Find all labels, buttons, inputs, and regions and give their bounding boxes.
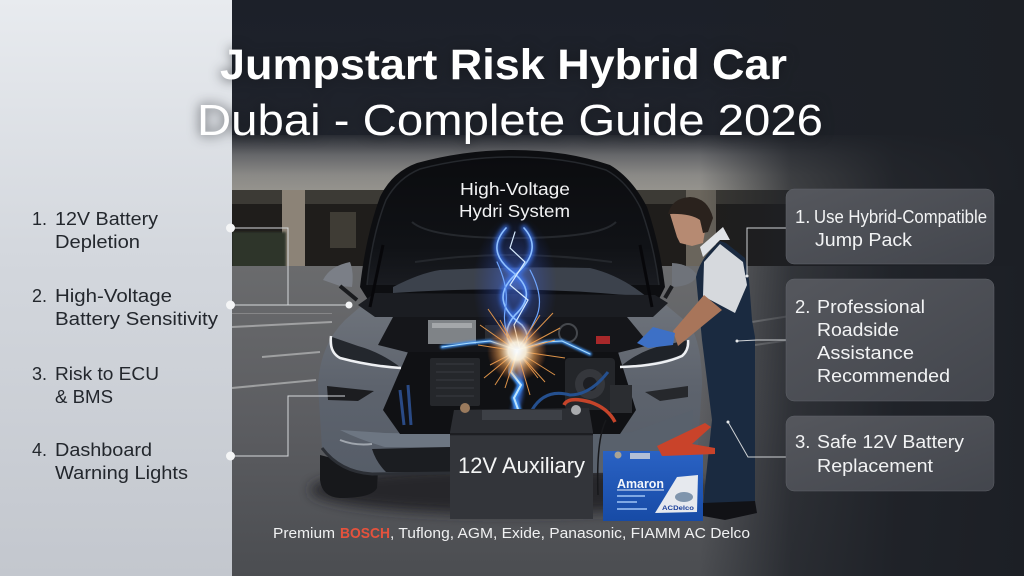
card 2: Roadside <box>817 319 899 340</box>
brand label: ACDelco <box>662 505 694 512</box>
sparks <box>478 309 565 395</box>
card 1 <box>786 189 994 264</box>
risk 2: High-Voltage <box>55 286 172 306</box>
brand label <box>617 475 698 513</box>
worker arm <box>673 295 722 346</box>
card 3 <box>786 416 994 491</box>
side mirrors <box>323 262 697 300</box>
risk 1 <box>32 209 158 252</box>
brands line: Premium <box>273 525 335 542</box>
brands line: BOSCH <box>340 525 390 542</box>
title: Jumpstart Risk Hybrid Car <box>220 41 787 89</box>
risk 4: Dashboard <box>55 440 152 460</box>
worker head <box>668 197 713 246</box>
card 2 <box>786 279 994 401</box>
car body <box>318 300 702 474</box>
risks list <box>32 209 218 483</box>
card 3: Replacement <box>817 455 933 476</box>
hood label: High-Voltage <box>460 179 570 199</box>
jump pack battery <box>603 423 715 521</box>
card 3: 3. <box>795 431 810 452</box>
12V auxiliary battery <box>450 400 615 519</box>
hood label <box>459 179 570 221</box>
title <box>197 41 823 145</box>
worker <box>637 197 757 520</box>
battery label: 12V Auxiliary <box>458 453 585 478</box>
risk 2: 2. <box>32 286 47 306</box>
blue glove <box>637 327 675 348</box>
engine bay <box>378 317 650 434</box>
right panel: actions <box>786 189 994 491</box>
lower bumper <box>322 410 693 474</box>
headlights <box>327 336 688 401</box>
hood label: Hydri System <box>459 201 570 221</box>
card 2: 2. <box>795 296 810 317</box>
risk 2 <box>32 286 218 329</box>
worker collar <box>700 227 730 257</box>
card 2: Professional <box>817 296 925 317</box>
card 1: Jump Pack <box>815 229 913 250</box>
left connectors <box>226 224 352 460</box>
car shadow and wheel <box>310 455 710 514</box>
worker boots <box>703 501 757 520</box>
electric arc <box>442 215 590 412</box>
right connectors <box>726 228 786 457</box>
card 2: Assistance <box>817 342 914 363</box>
car <box>310 150 710 514</box>
card 1: Use Hybrid-Compatible <box>814 206 987 227</box>
risk 4 <box>32 440 188 483</box>
risk 3: & BMS <box>55 387 113 407</box>
left panel <box>0 0 232 576</box>
title: Dubai - Complete Guide 2026 <box>197 96 823 145</box>
risk 1: 1. <box>32 209 47 229</box>
card 1: 1. <box>795 206 810 227</box>
worker shirt <box>703 244 747 313</box>
risk 4: 4. <box>32 440 47 460</box>
risk 1: Depletion <box>55 232 140 252</box>
card 3: Safe 12V Battery <box>817 431 965 452</box>
open hood <box>358 150 668 317</box>
red clamp <box>657 423 715 456</box>
risk 4: Warning Lights <box>55 463 188 483</box>
risk 3: 3. <box>32 364 47 384</box>
background: parking garage scene <box>232 0 1024 576</box>
risk 3: Risk to ECU <box>55 364 159 384</box>
risk 3 <box>32 364 159 407</box>
risk 2: Battery Sensitivity <box>55 309 218 329</box>
risk 1: 12V Battery <box>55 209 158 229</box>
card 2: Recommended <box>817 365 950 386</box>
brands line: , Tuflong, AGM, Exide, Panasonic, FIAMM AC Delco <box>390 525 750 542</box>
brand label: Amaron <box>617 476 664 491</box>
worker overalls <box>696 241 755 505</box>
